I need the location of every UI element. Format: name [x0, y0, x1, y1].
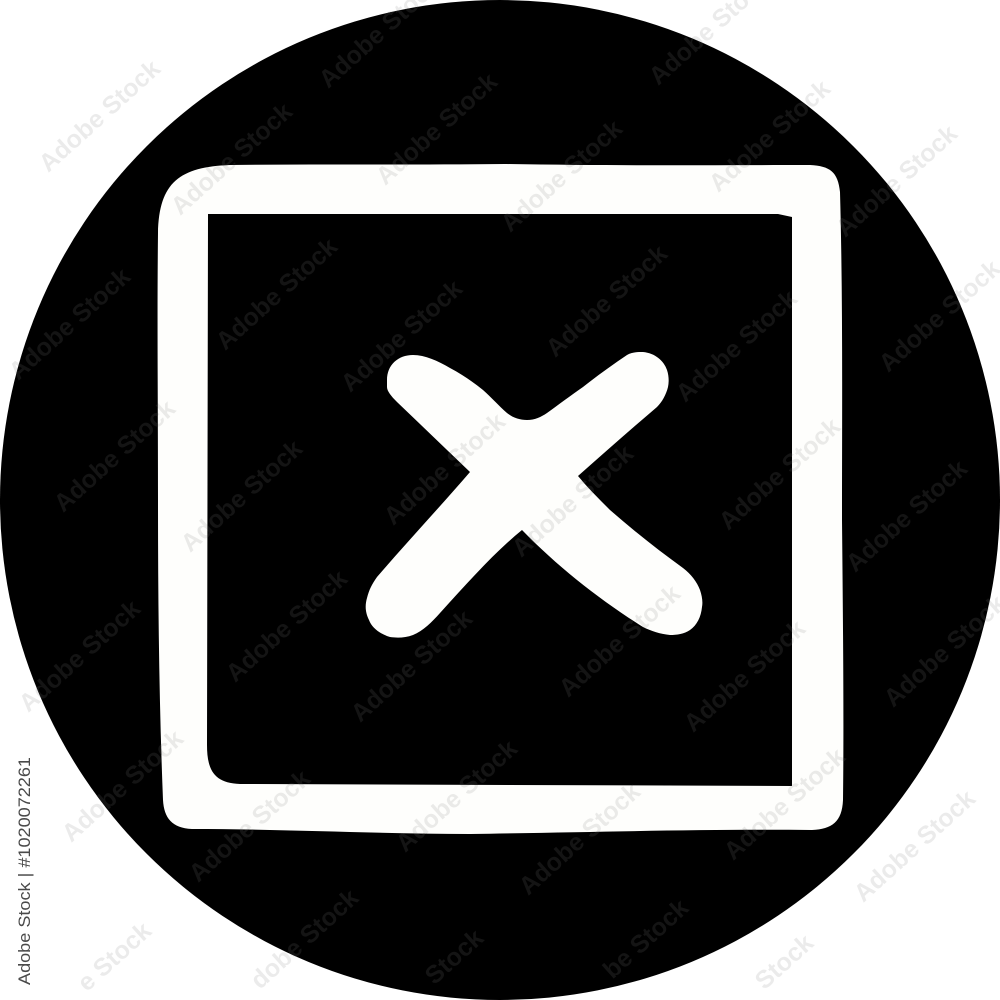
- stock watermarks: Adobe Stock: [719, 742, 851, 866]
- stock watermarks: Adobe Stock: [704, 74, 836, 198]
- stock watermarks: dobe Stock: [245, 884, 364, 995]
- stock watermarks: Adobe Stock: [379, 407, 511, 531]
- stock watermarks: Adobe Stock: [221, 564, 353, 688]
- stock watermarks: Adobe Stock: [671, 284, 803, 408]
- stock watermarks: Adobe Stock: [514, 777, 646, 901]
- stock watermarks: Adobe Stock: [34, 54, 166, 178]
- stock watermarks: Adobe Stock: [841, 454, 973, 578]
- stock watermarks: Adobe Stock: [184, 764, 316, 888]
- stock watermarks: Adobe Stock: [176, 434, 308, 558]
- stock watermarks: Adobe Stock: [541, 239, 673, 363]
- x mark: [366, 352, 702, 638]
- stock watermarks: Adobe Stock: [57, 724, 189, 848]
- stock watermarks: Adobe Stock: [336, 274, 468, 398]
- stock watermarks: Adobe Stock: [849, 784, 981, 908]
- stock watermarks: Adobe Stock: [14, 594, 146, 718]
- stock watermarks: Adobe Stock: [831, 119, 963, 243]
- stock watermarks: Adobe Stock: [714, 412, 846, 536]
- stock watermarks: Adobe Stock: [371, 67, 503, 191]
- stock watermarks: Adobe Stock: [496, 114, 628, 238]
- stock credit text: Adobe Stock | #1020072261: [15, 757, 34, 985]
- square outline: [158, 164, 843, 834]
- stock watermarks: Adobe Stock: [391, 734, 523, 858]
- stock watermarks: Adobe Stock: [166, 97, 298, 221]
- stock watermarks: Adobe Stock: [4, 262, 136, 386]
- stock watermarks: Adobe Stock: [679, 614, 811, 738]
- stock watermarks: be Stock: [598, 894, 694, 984]
- stock watermarks: e Stock: [72, 917, 157, 997]
- stock watermarks: Stock: [750, 929, 819, 995]
- stock watermarks: Adobe Stock: [211, 232, 343, 356]
- stock watermarks: Adobe Stock: [507, 439, 639, 563]
- stock watermarks: Stock: [420, 924, 489, 990]
- stock watermarks: Adobe Stock: [49, 394, 181, 518]
- stock watermarks: Adobe Stock: [554, 579, 686, 703]
- stock watermarks: Adobe Stock: [346, 604, 478, 728]
